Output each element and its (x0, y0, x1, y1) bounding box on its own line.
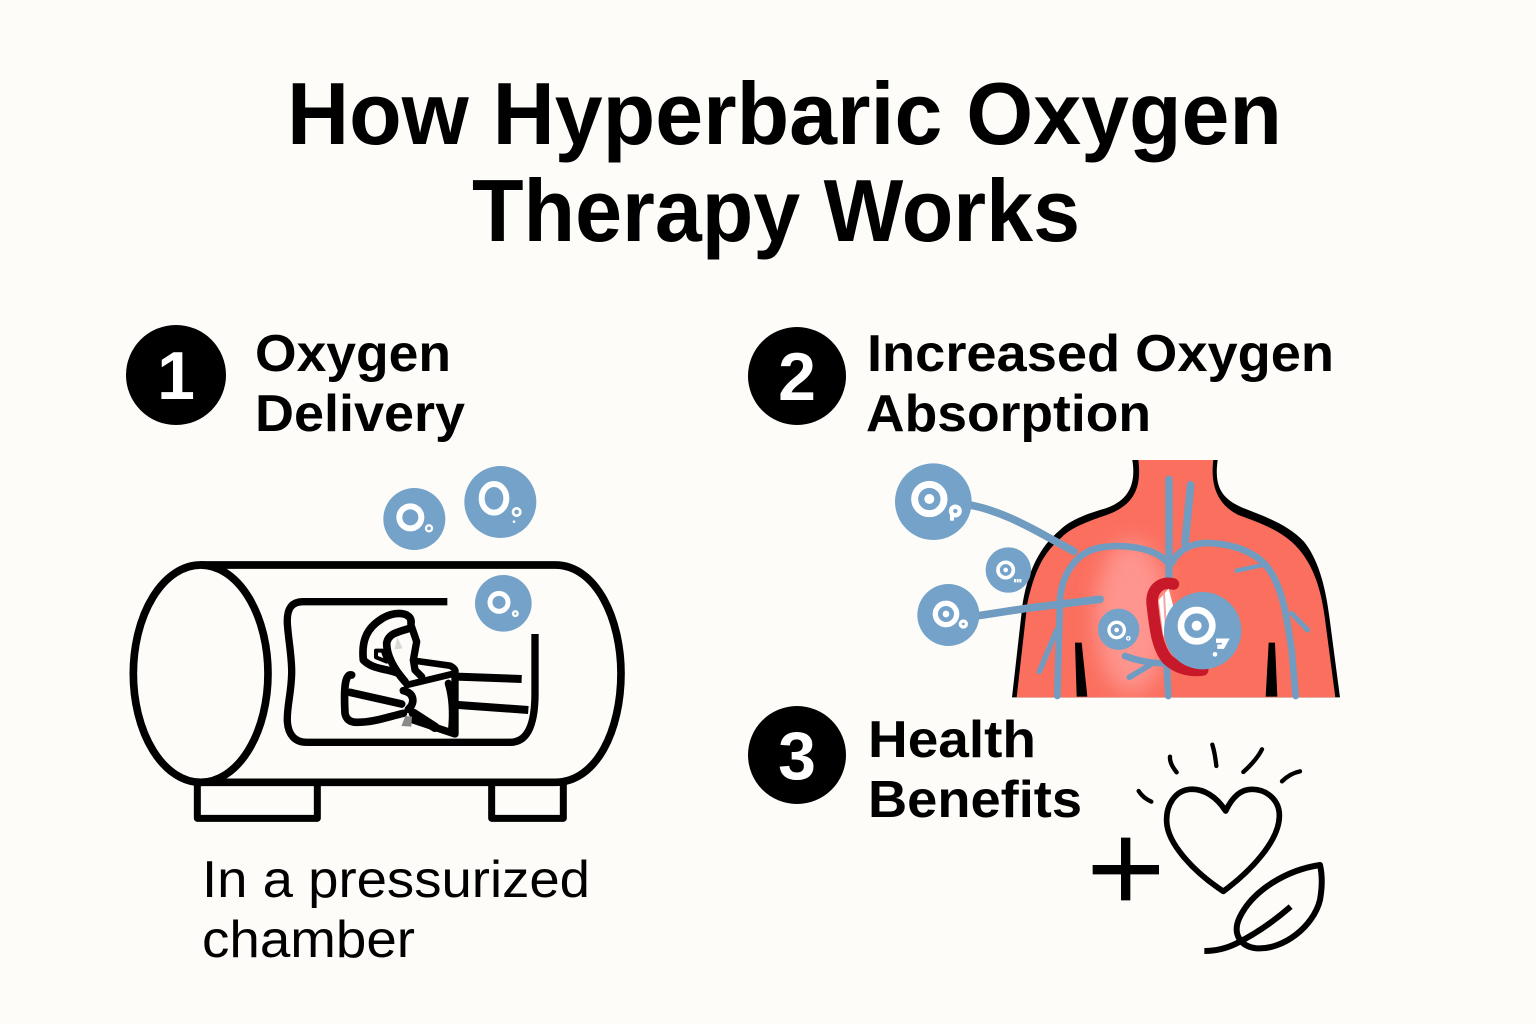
step 3 heading: Benefits (868, 771, 1082, 829)
title: How Hyperbaric Oxygen (287, 64, 1282, 163)
step 3 heading (868, 711, 1082, 829)
chamber caption: In a pressurized (202, 851, 590, 909)
heart (1152, 583, 1203, 670)
chamber caption (202, 851, 590, 969)
title (287, 64, 1282, 260)
step 2 heading (866, 325, 1334, 443)
oxygen bubble small (986, 547, 1031, 593)
chamber caption: chamber (202, 911, 415, 969)
oxygen bubble on chest (1098, 609, 1139, 650)
icon: leaf (1204, 865, 1322, 951)
oxygen bubble middle left (917, 584, 979, 646)
oxygen bubbles around chamber (383, 466, 536, 632)
bubble in chamber (475, 575, 532, 632)
step 1 number badge (126, 325, 226, 425)
icon: radiating lines (1139, 745, 1300, 802)
armpit shadows (1075, 643, 1277, 697)
patient in chamber (345, 613, 528, 734)
blood vessels (970, 479, 1308, 696)
step 3 number badge (748, 706, 846, 804)
torso illustration (895, 460, 1340, 697)
icon: plus (1093, 838, 1159, 900)
chamber window (287, 602, 535, 742)
step 3 heading: Health (868, 711, 1036, 769)
step 2 heading: Absorption (866, 385, 1151, 443)
torso outline (1012, 460, 1340, 697)
hyperbaric chamber illustration (133, 565, 621, 818)
bubble right (464, 466, 536, 538)
chamber end cap (133, 565, 268, 782)
chamber feet (197, 785, 563, 818)
step 3 number badge: 3 (778, 718, 816, 794)
step 2 number badge (748, 327, 846, 425)
bubble left (383, 488, 445, 550)
health benefits icons (1093, 745, 1322, 951)
step 2 heading: Increased Oxygen (867, 325, 1334, 383)
title: Therapy Works (472, 161, 1080, 260)
chamber body (201, 565, 621, 782)
oxygen bubble large left (895, 463, 972, 540)
chest glow (1095, 540, 1168, 693)
step 1 heading: Oxygen (255, 325, 451, 383)
step 2 number badge: 2 (778, 339, 816, 415)
step 1 number badge: 1 (157, 338, 195, 414)
torso fill (1017, 460, 1335, 697)
step 1 heading (255, 325, 465, 443)
step 1 heading: Delivery (255, 385, 465, 443)
oxygen bubble over heart (1164, 592, 1241, 669)
icon: heart (1167, 789, 1279, 891)
